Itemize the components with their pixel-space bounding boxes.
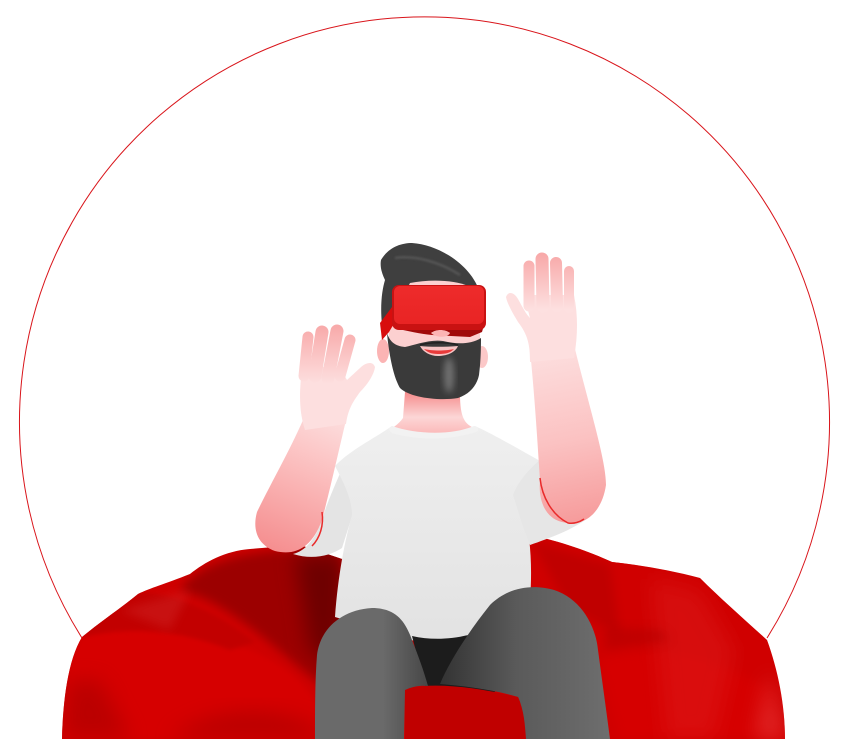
beanbag left dark fold bbox=[180, 549, 340, 700]
left sleeve bbox=[293, 462, 354, 557]
face bbox=[388, 281, 480, 352]
hair bbox=[381, 243, 479, 325]
right hand bbox=[506, 259, 577, 362]
beard bbox=[387, 333, 481, 399]
shirt torso bbox=[335, 426, 542, 642]
headset front bbox=[392, 285, 486, 330]
right leg bbox=[440, 587, 610, 739]
ears bbox=[377, 339, 389, 363]
mouth bbox=[420, 346, 458, 356]
beanbag left lower cushion bbox=[62, 634, 85, 736]
dark shorts bbox=[412, 634, 495, 692]
left elbow red trim bbox=[312, 512, 323, 546]
beanbag right side bbox=[548, 539, 785, 736]
left arm bbox=[255, 412, 348, 552]
head bbox=[377, 243, 488, 399]
left hand bbox=[300, 331, 375, 430]
neck bbox=[392, 392, 474, 434]
seat cushion between legs bbox=[405, 686, 526, 739]
right sleeve bbox=[513, 460, 588, 545]
thin red circle outline bbox=[20, 17, 830, 638]
headset lower shell bbox=[393, 316, 486, 337]
beanbag bbox=[62, 535, 785, 739]
shirt collar bbox=[389, 426, 478, 439]
right elbow red trim bbox=[540, 478, 584, 523]
left leg bbox=[315, 608, 428, 739]
headset strap bbox=[380, 307, 395, 340]
nose bbox=[431, 330, 450, 337]
right arm bbox=[530, 345, 606, 523]
